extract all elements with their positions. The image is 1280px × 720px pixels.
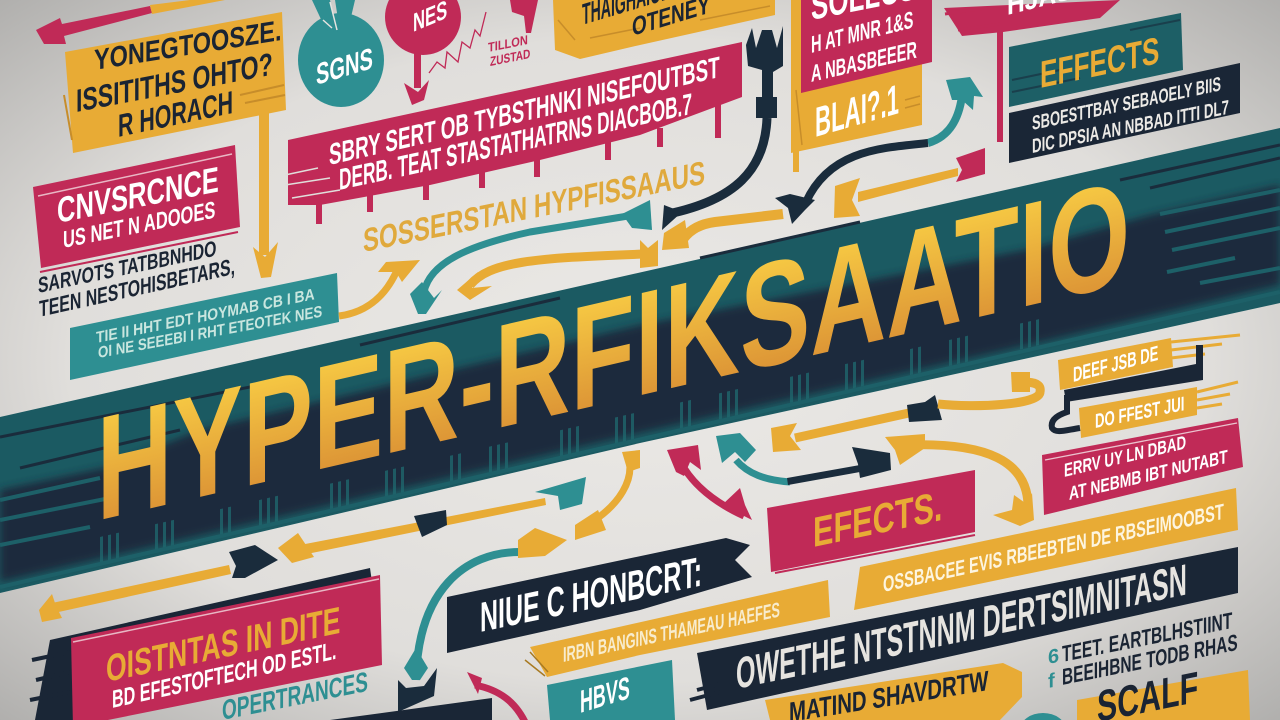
text block: black caption: SARVOTS TATBBNHDO (38, 237, 216, 299)
heading: yellow subtitle: SOSSERSTAN HYPFISSAAUS (363, 155, 705, 260)
red squiggle doodle: TILLON (488, 32, 528, 55)
arrow: yellow long lower left (39, 545, 278, 622)
arrow: teal curved down (398, 528, 567, 712)
arrow: yellow to left (662, 214, 783, 250)
panel: red convergence box (33, 145, 240, 272)
icon: red circle with arrow (385, 0, 461, 105)
teal blob bottom (1020, 713, 1066, 720)
panel: teal note box (70, 273, 339, 380)
panel: red distance box: OISTNTAS IN DITE (106, 598, 340, 690)
panel: red distance box (30, 568, 382, 720)
panel: navy headline box: NIUE C HONBCRT: (480, 549, 702, 642)
panel: navy description box: SBOESTTBAY SEBAOELY BIIS (1032, 73, 1221, 135)
arrow: red double head (667, 445, 752, 520)
red drip (510, 0, 538, 33)
panel: yellow strip (525, 580, 830, 677)
arrow: yellow with navy block (771, 372, 1040, 452)
panel: navy headline box (447, 538, 752, 653)
arrow: navy hook (662, 26, 783, 230)
main title banner (0, 128, 1280, 593)
arrow: yellow from teal box (339, 260, 420, 316)
panel: red long banner: SBRY SERT OB TYBSTHNKI NISEFOUTBST (329, 51, 720, 172)
panel: red small note: AT NEBMB IBT NUTABT (1069, 446, 1228, 505)
arrow: yellow with navy and teal heads (278, 477, 586, 563)
arrow: teal curved (410, 200, 652, 314)
panel: teal note box: TIE II HHT EDT HOYMAB CB I BA (96, 286, 315, 347)
panel: red small note (1042, 418, 1243, 515)
panel: teal bottom card: HBVS (580, 669, 630, 720)
panel: small yellow tag one: DEEF JSB DE (1073, 341, 1159, 387)
panel: red top right tag (944, 0, 1120, 142)
panel: red effects tag (767, 470, 975, 573)
arrow: teal to navy (716, 433, 891, 485)
title text: HYPER-RFIKSAATIO (96, 150, 1130, 553)
text block: black note lower right: 6 (1048, 645, 1059, 669)
panel: yellow bottom right (1077, 664, 1250, 720)
arrow: red curve bottom (467, 672, 525, 720)
connector: navy bracket (1052, 345, 1203, 431)
panel: red card top: A NBASBEEER (811, 37, 917, 88)
panel: red effects tag: EFECTS. (813, 481, 942, 556)
text block: black note lower right: TEET. EARTBLHSTIINT (1062, 608, 1232, 668)
icon: teal circle signs (298, 0, 384, 107)
panel: yellow box under red card (791, 0, 922, 172)
panel: red long banner (285, 42, 742, 224)
red squiggle doodle: ZUSTAD (490, 47, 530, 69)
panel: yellow question box: YONEGTOOSZE. (94, 14, 281, 77)
text block: black note lower right (1048, 608, 1238, 693)
navy strip bottom (330, 698, 492, 720)
panel: red card top: H AT MNR 1&S (811, 7, 913, 59)
panel: yellow box under red card: BLAI?.1 (815, 76, 899, 147)
arrow: yellow curve to down (885, 434, 1034, 526)
panel: teal note box: OI NE SEEEBI I RHT ETEOTEK NES (98, 304, 322, 362)
text block: black caption: TEEN NESTOHISBETARS, (39, 254, 235, 323)
arrow: yellow with red head (834, 148, 985, 218)
panel: teal effects box: EFFECTS (1040, 28, 1159, 96)
panel: red convergence box: CNVSRCNCE (57, 159, 219, 231)
panel: teal bottom card (547, 660, 675, 720)
panel: yellow long strip: OSSBACEE EVIS RBEEBTEN DE RBSEIMOOBST (883, 499, 1224, 597)
panel: navy long strip: OWETHE NTSTNNM DERTSIMNITASN (736, 554, 1187, 699)
arrow: yellow curl (575, 450, 640, 540)
arrow: yellow pole down (253, 113, 278, 278)
arrow: yellow curved left (457, 240, 658, 300)
icon: teal circle signs: SGNS (316, 42, 373, 92)
red squiggle doodle (429, 12, 530, 73)
panel: red long banner: DERB. TEAT STASTATHATRNS DIACBOB.7 (339, 88, 692, 197)
panel: yellow question box: ISSITITHS OHTO? (76, 46, 273, 119)
panel: small yellow tag two (1079, 382, 1238, 438)
panel: red convergence box: US NET N ADOOES (63, 197, 216, 254)
panel: yellow question box: R HORACH (118, 84, 233, 144)
text block: black note lower right: f (1048, 670, 1055, 693)
panel: navy description box: DIC DPSIA AN NBBAD ITTI DL7 (1032, 96, 1229, 158)
panel: teal effects box (1009, 13, 1183, 107)
panel: small yellow tag one (1058, 335, 1240, 390)
panel: small yellow tag two: DO FFEST JUI (1095, 393, 1184, 433)
panel: red small note: ERRV UY LN DBAD (1064, 431, 1186, 482)
panel: yellow question box (64, 12, 286, 153)
panel: navy description box (1009, 63, 1240, 163)
arrow: navy and teal swoop (775, 77, 983, 224)
panel: top yellow box (553, 0, 775, 59)
top-left red arrow (36, 0, 225, 44)
text block: black note lower right: BEEIHBNE TODB RHAS (1062, 630, 1238, 691)
panel: red card top (801, 0, 932, 93)
panel: yellow strip: IRBN BANGINS THAMEAU HAEFES (563, 597, 780, 667)
panel: red distance box: BD EFESTOFTECH OD ESTL. (112, 637, 336, 714)
